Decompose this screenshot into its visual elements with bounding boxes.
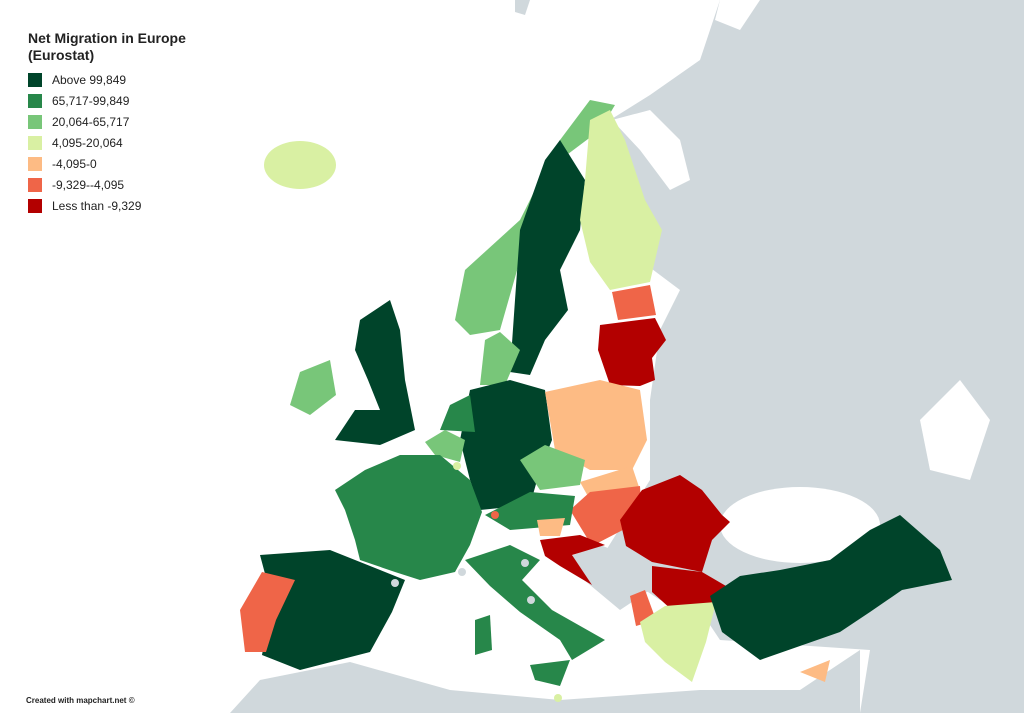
Albania	[630, 590, 656, 626]
legend: (Eurostat)	[28, 47, 94, 63]
Slovakia	[580, 466, 640, 500]
Romania	[620, 475, 730, 572]
legend: -4,095-0	[52, 156, 97, 170]
Iceland	[264, 141, 336, 189]
Sweden	[510, 140, 585, 375]
Cyprus	[800, 660, 830, 682]
Spain	[260, 550, 405, 670]
Italy	[465, 545, 605, 686]
legend: Net Migration in Europe	[28, 30, 186, 46]
legend: Less than -9,329	[52, 198, 141, 212]
small states	[391, 462, 562, 702]
Czechia	[520, 445, 585, 490]
legend	[28, 30, 186, 213]
legend: 4,095-20,064	[52, 136, 123, 150]
legend: -9,329--4,095	[52, 178, 124, 192]
Estonia	[612, 285, 656, 320]
Slovenia	[537, 518, 565, 536]
Netherlands	[440, 395, 475, 432]
sea: Black Sea and Baltic	[560, 0, 990, 563]
Belgium	[425, 430, 465, 462]
France	[335, 455, 482, 580]
UK	[335, 300, 415, 445]
Turkey	[710, 515, 952, 660]
grey land: Russia and east	[230, 0, 1024, 713]
Poland	[545, 380, 647, 470]
legend: 65,717-99,849	[52, 94, 129, 108]
Bulgaria	[652, 566, 726, 610]
Austria	[485, 492, 575, 530]
Denmark	[480, 332, 520, 385]
credit: Created with mapchart.net ©	[26, 696, 135, 705]
Finland	[580, 110, 662, 290]
Portugal	[240, 572, 295, 652]
legend: 20,064-65,717	[52, 114, 129, 128]
Hungary	[570, 486, 642, 546]
Latvia/Lithuania	[598, 318, 666, 386]
Germany	[460, 380, 552, 510]
Ireland	[290, 360, 336, 415]
Croatia	[540, 535, 605, 585]
legend: Above 99,849	[52, 72, 126, 86]
Greece	[640, 602, 716, 682]
Norway	[455, 100, 615, 335]
